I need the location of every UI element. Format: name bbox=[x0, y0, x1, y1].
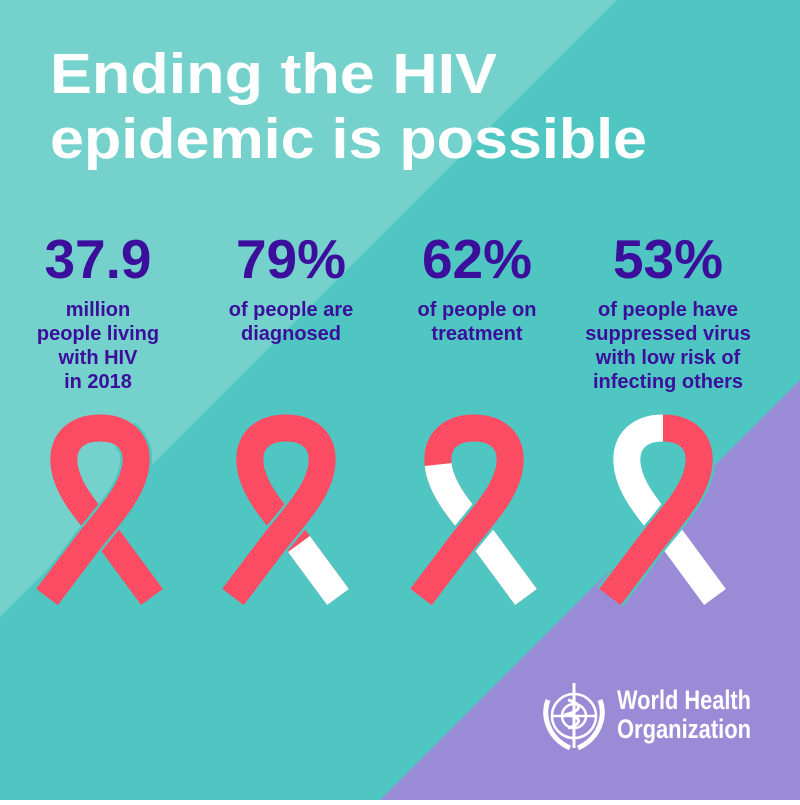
stat: 53%: of people have bbox=[598, 299, 738, 321]
icon: ribbon 4 (53%) bbox=[610, 428, 715, 597]
title: epidemic is possible bbox=[50, 107, 647, 171]
stat: 79%: of people are bbox=[229, 299, 353, 321]
stat: 53%: with low risk of bbox=[595, 347, 741, 369]
icon: ribbon 3 (62%) bbox=[421, 428, 526, 597]
icon: ribbon 1 (all red) bbox=[47, 428, 152, 597]
title: Ending the HIV bbox=[50, 42, 497, 106]
stat: 62%: of people on bbox=[418, 299, 536, 321]
stat: 53% bbox=[585, 228, 751, 393]
stat: 53%: 53% bbox=[613, 228, 723, 290]
stat: 53%: suppressed virus bbox=[585, 323, 751, 345]
stat: 53%: infecting others bbox=[593, 371, 743, 393]
stat: 62% bbox=[418, 228, 536, 345]
stat: 79%: 79% bbox=[236, 228, 346, 290]
stat: 79%: diagnosed bbox=[241, 323, 341, 345]
stat: 37.9 million bbox=[37, 228, 159, 393]
stat: 62%: treatment bbox=[431, 323, 523, 345]
logo: WHO emblem bbox=[546, 683, 602, 748]
stat: 37.9 million: 37.9 bbox=[44, 228, 152, 290]
stat: 62%: 62% bbox=[422, 228, 532, 290]
stat: 37.9 million: people living bbox=[37, 323, 159, 345]
title bbox=[50, 42, 647, 171]
stat: 37.9 million: million bbox=[66, 299, 130, 321]
stat: 37.9 million: with HIV bbox=[58, 347, 138, 369]
stat: 79% bbox=[229, 228, 353, 345]
logo: WHO text: World Health bbox=[617, 685, 751, 715]
logo: WHO text bbox=[617, 685, 751, 744]
logo: WHO text: Organization bbox=[617, 714, 751, 744]
stat: 37.9 million: in 2018 bbox=[64, 371, 132, 393]
icon: ribbon 2 (79%) bbox=[233, 428, 338, 597]
